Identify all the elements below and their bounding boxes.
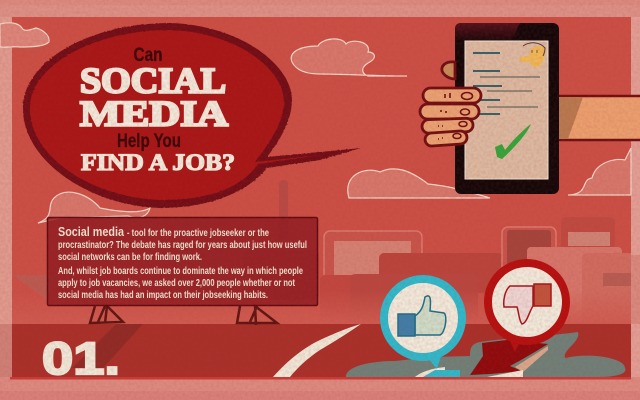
title text: SOCIAL bbox=[80, 60, 226, 100]
thumb behind bbox=[442, 62, 455, 79]
hand bbox=[420, 62, 481, 146]
puddle bbox=[346, 332, 625, 377]
text box: introduction: social media has had an impact on their jobseeking habits. bbox=[58, 290, 268, 301]
text box: introduction: And, whilst job boards continue to dominate the way in which people bbox=[58, 266, 303, 277]
thumbs down marker bbox=[488, 263, 566, 352]
road shadow bbox=[72, 324, 143, 368]
billboard legs bbox=[90, 306, 277, 325]
cloud: top centre bbox=[291, 39, 407, 76]
road curve bbox=[273, 324, 361, 377]
road piece left bbox=[415, 367, 445, 377]
title text: Help You bbox=[117, 131, 181, 152]
check mark bbox=[495, 124, 531, 159]
road piece right bbox=[487, 370, 523, 377]
text box: introduction: Social media bbox=[58, 224, 125, 239]
text box: introduction: social networks can be for finding work. bbox=[58, 252, 202, 263]
red baseline bbox=[10, 377, 631, 380]
text box: introduction: procrastinator? The debate has raged for years about just how useful bbox=[58, 240, 307, 251]
thumbs up marker bbox=[384, 279, 462, 377]
tablet with CV bbox=[455, 23, 559, 194]
title text: Can bbox=[134, 45, 162, 66]
icon: thumbs down bbox=[504, 284, 551, 324]
CV text lines bbox=[473, 53, 540, 114]
title text: MEDIA bbox=[80, 94, 228, 134]
icon: thumbs up bbox=[398, 296, 446, 336]
section number: 01. bbox=[42, 333, 120, 384]
cloud: top left bbox=[0, 23, 49, 47]
text box: introduction: - tool for the proactive jobseeker or the bbox=[127, 228, 269, 239]
text box: introduction: apply to job vacancies, we asked over 2,000 people whether or not bbox=[58, 278, 295, 289]
clouds bbox=[0, 23, 631, 223]
fingers bbox=[423, 88, 481, 103]
text box: introduction bbox=[48, 218, 318, 306]
arm bbox=[555, 96, 640, 140]
title text bbox=[80, 45, 235, 175]
tan crack edge bbox=[515, 346, 548, 372]
knuckle marks bbox=[438, 93, 450, 139]
fingernails bbox=[462, 92, 472, 100]
cloud: bottom right bbox=[568, 148, 631, 195]
road band bbox=[12, 324, 631, 377]
CV portrait bbox=[519, 43, 545, 67]
cloud: below tablet hand bbox=[348, 169, 490, 198]
cloud: under bubble bbox=[38, 192, 150, 223]
background: faded tablets bbox=[12, 180, 640, 324]
title text: FIND A JOB? bbox=[81, 150, 235, 175]
speech bubble bbox=[23, 23, 361, 208]
dark red crack bbox=[470, 340, 548, 375]
CV page bbox=[465, 41, 548, 179]
